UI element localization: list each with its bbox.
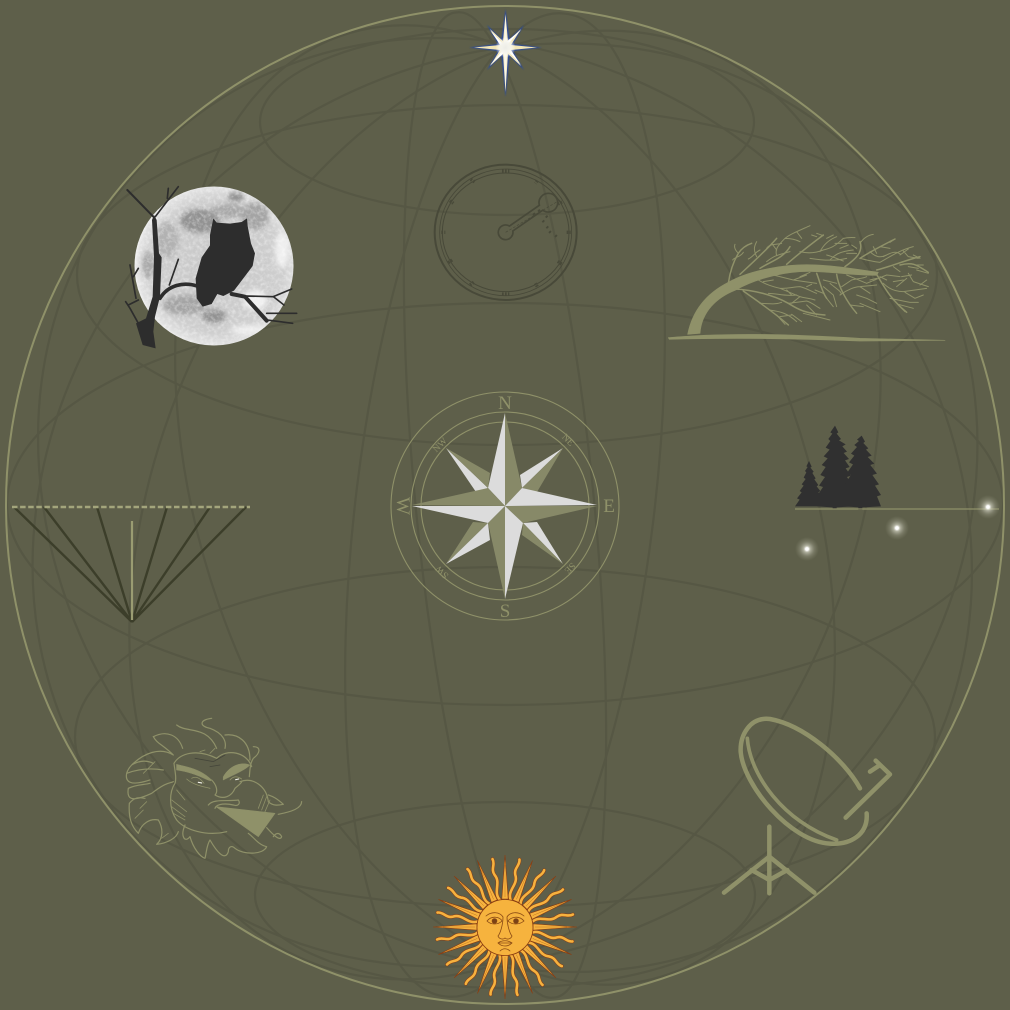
icon: wind-blowing face <box>126 718 302 858</box>
lower branches <box>735 273 907 325</box>
icon: sun with face <box>433 855 577 999</box>
facial hatching <box>135 748 270 838</box>
moon <box>134 186 294 346</box>
bare tree <box>126 187 297 348</box>
icon: satellite dish <box>724 719 890 893</box>
intercardinal points <box>446 448 563 564</box>
brows <box>177 764 212 781</box>
cardinal labels: NW <box>431 436 450 455</box>
icon: wind-bent tree <box>668 226 945 341</box>
cardinal labels: E <box>603 496 615 517</box>
hair <box>153 718 259 777</box>
cardinal labels: N <box>498 393 512 414</box>
sun face <box>477 900 533 956</box>
compass rings <box>391 392 619 620</box>
icon: sun angle fan diagram <box>12 507 250 622</box>
cardinal labels <box>392 393 615 622</box>
icon: compass rose <box>391 392 619 622</box>
icon: owl on branch with full moon <box>126 186 297 348</box>
horn <box>216 807 275 837</box>
eyes <box>198 779 239 783</box>
cardinal labels: SW <box>434 563 451 580</box>
cardinal points <box>412 413 597 599</box>
trunk and main limb <box>688 265 878 334</box>
icon: pine trees on horizon <box>795 426 1000 561</box>
upper branches <box>728 235 928 283</box>
owl <box>196 218 255 307</box>
sun rays <box>433 855 577 999</box>
cardinal labels: S <box>500 601 510 622</box>
sun glows <box>976 495 1000 519</box>
horizon line <box>795 508 999 510</box>
cardinal labels: SE <box>562 560 577 575</box>
cardinal labels: NE <box>559 433 576 449</box>
cardinal labels: W <box>392 497 413 515</box>
icon: astrolabe dial <box>435 165 577 300</box>
icon: north star <box>469 9 542 97</box>
ground <box>668 334 945 341</box>
